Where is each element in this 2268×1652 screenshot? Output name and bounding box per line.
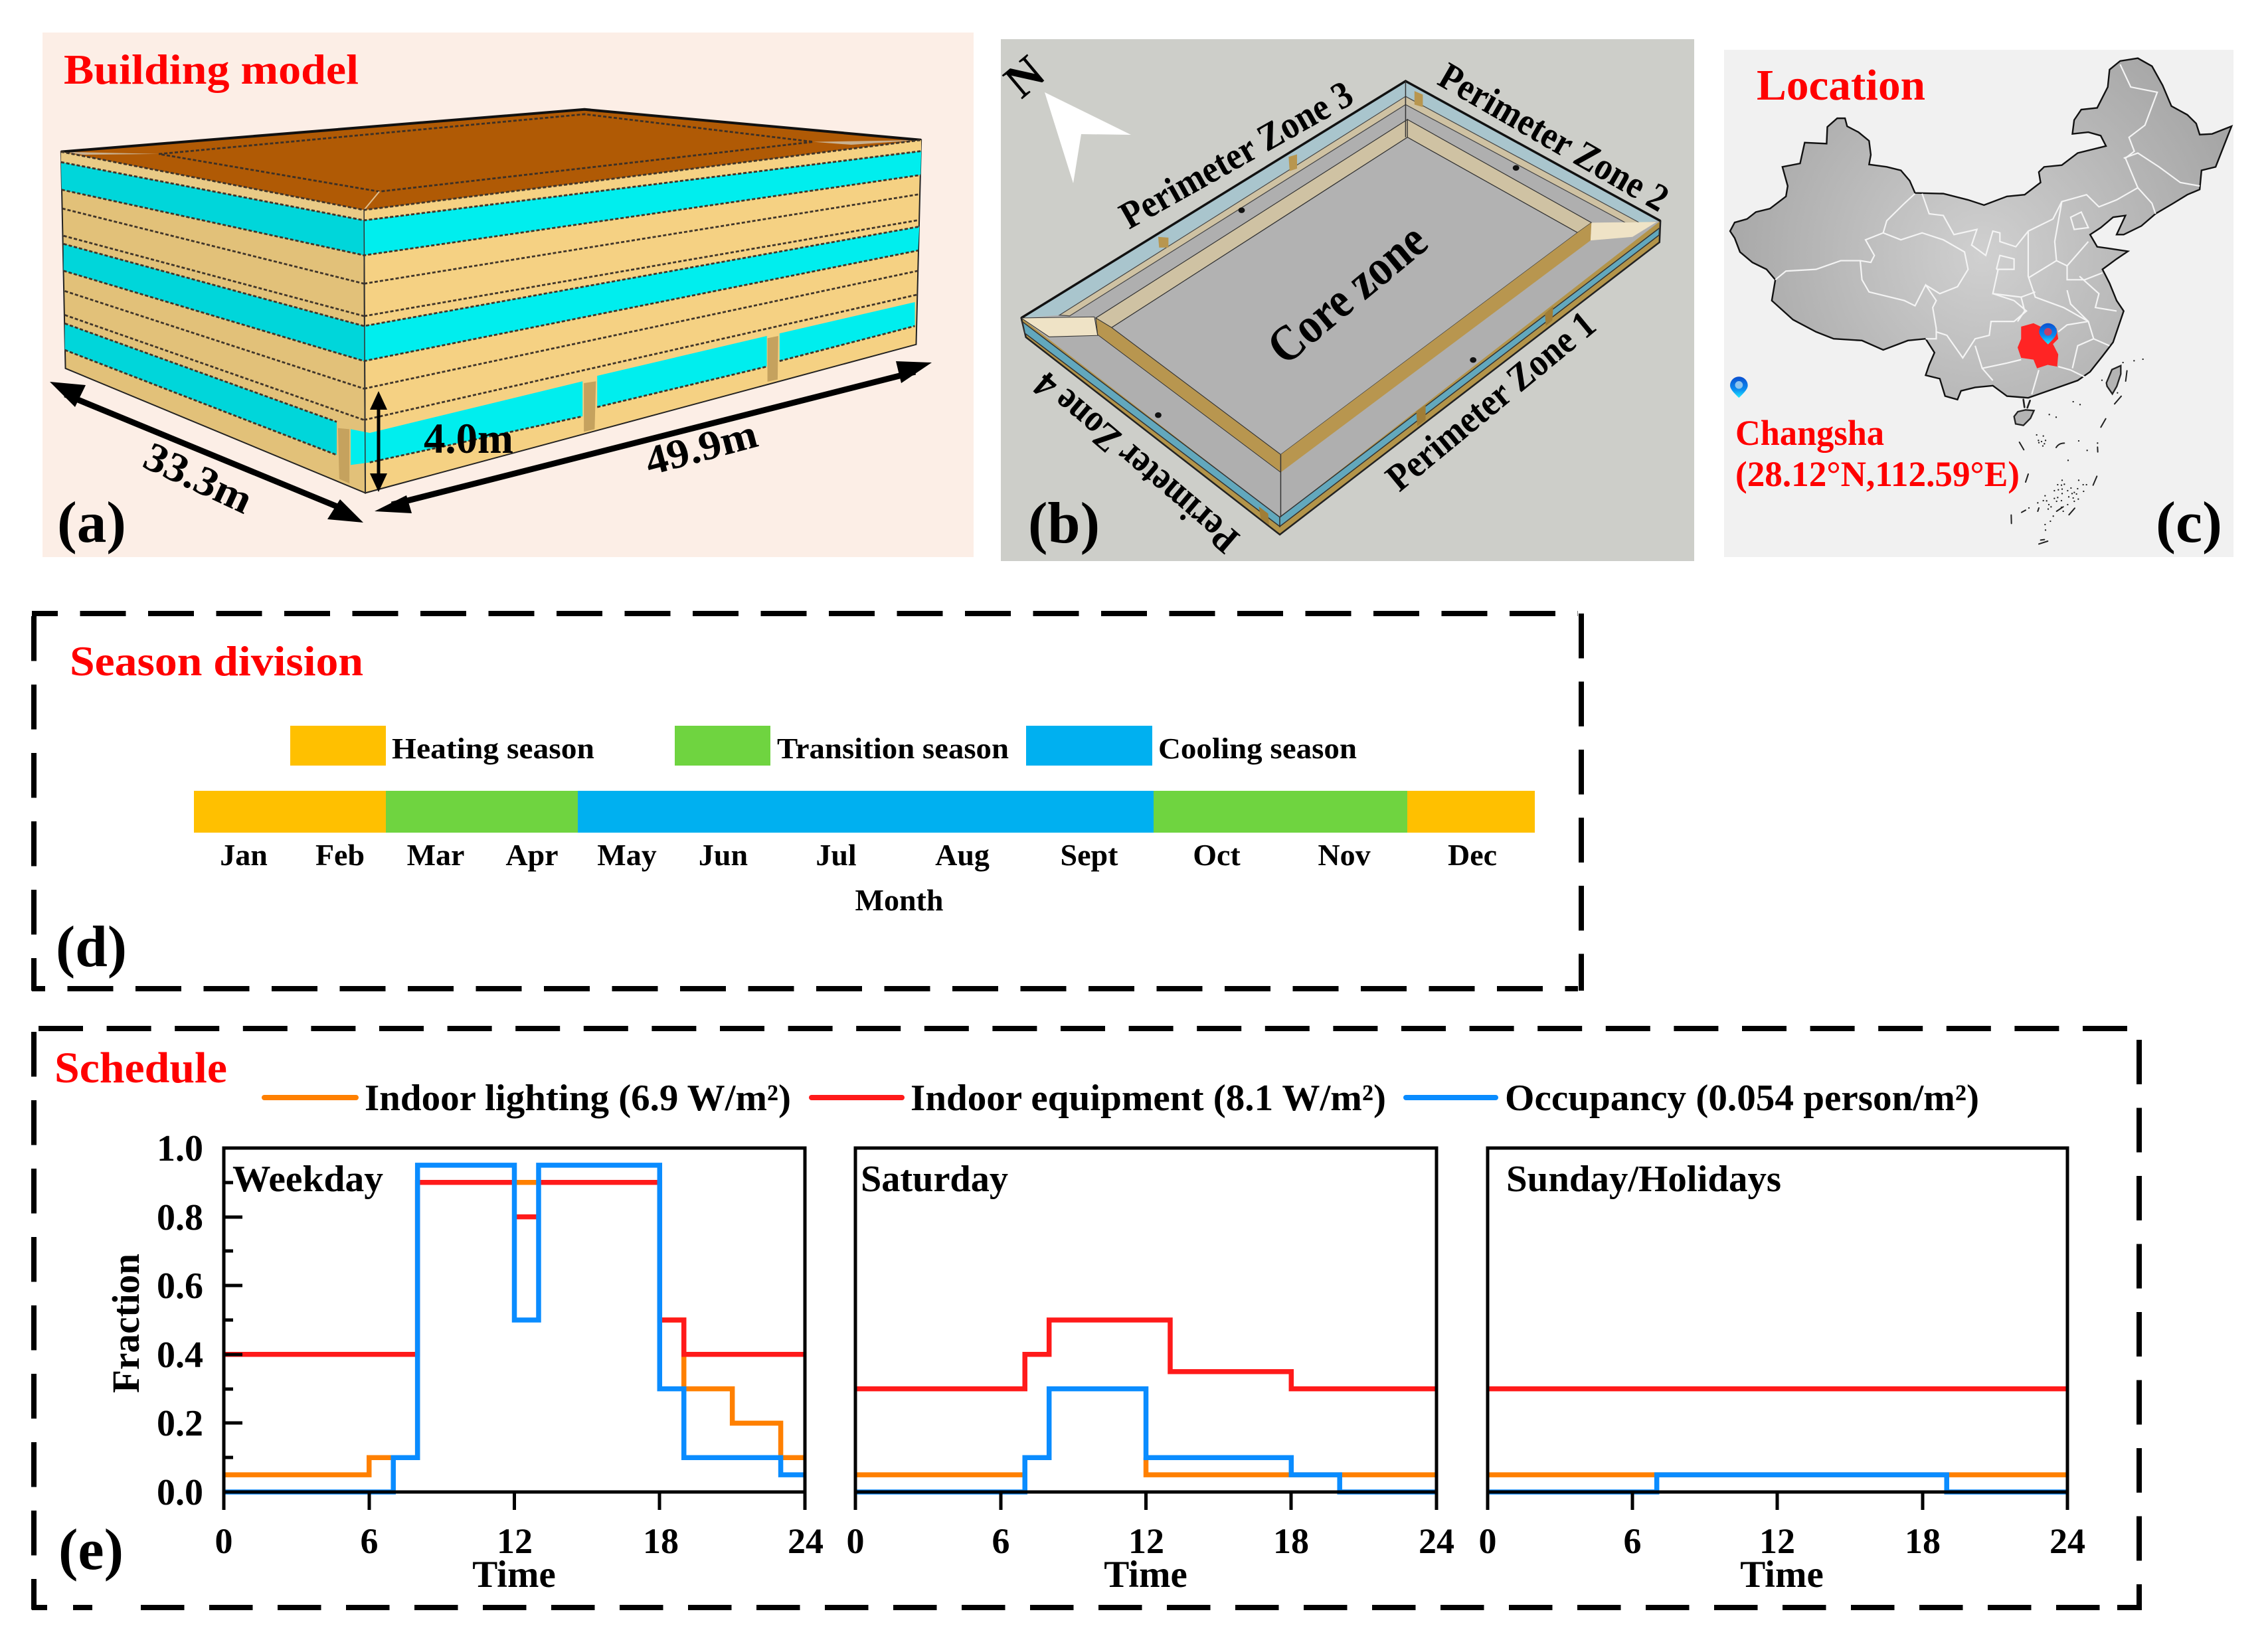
chart: Weekday (104, 1128, 824, 1596)
axis title: Time: Time (472, 1554, 556, 1596)
dashed frame (32, 1029, 2142, 1610)
panel label (b): (b) (1028, 491, 1100, 556)
y axis tick labels: 1.0 (157, 1128, 203, 1169)
legend: Occupancy (0.054 person/m²) (1505, 1078, 1979, 1119)
x axis tick labels: 12 (1128, 1521, 1164, 1561)
heading: Building model: Building model (64, 46, 359, 93)
icon: pin on Changsha (2039, 323, 2057, 345)
month labels: Feb (315, 838, 365, 872)
month labels: May (597, 838, 657, 872)
panel label (a): (a) (57, 491, 126, 555)
panel: schedule (e) (32, 1029, 2142, 1610)
label: N: N (994, 45, 1055, 108)
x axis tick labels: 24 (1419, 1521, 1454, 1561)
legend: Indoor lighting (6.9 W/m²) (365, 1078, 791, 1119)
panel: building model (a) (43, 33, 974, 557)
y axis tick labels: 0.0 (157, 1472, 203, 1513)
season bar (194, 791, 1535, 833)
arrow: 49.9m length dimension (375, 361, 932, 513)
panel label (c): (c) (2156, 491, 2222, 555)
x axis tick labels: 0 (1478, 1521, 1497, 1561)
panel: location map (c) (1724, 50, 2233, 557)
axis title: Time: Time (1104, 1554, 1187, 1596)
x axis tick labels: 24 (788, 1521, 824, 1561)
legend: Cooling season (1158, 732, 1357, 765)
panel label (e): (e) (58, 1518, 124, 1582)
x axis tick labels (215, 1521, 824, 1561)
chart: Sunday/Holidays (1478, 1148, 2085, 1596)
month labels: Dec (1448, 838, 1497, 872)
month labels: Nov (1318, 838, 1371, 872)
chart title: Weekday: Weekday (232, 1159, 383, 1200)
axis title: Time: Time (1740, 1554, 1824, 1596)
x axis tick labels: 24 (2050, 1521, 2085, 1561)
label: Changsha coordinates: Changsha (1735, 413, 1884, 453)
legend (264, 1078, 1979, 1119)
month labels: Aug (935, 838, 990, 872)
legend: Indoor equipment (8.1 W/m²) (911, 1078, 1386, 1119)
y axis tick labels: 0.6 (157, 1266, 203, 1307)
axis title: Month: Month (855, 883, 943, 917)
Hunan province highlight (2018, 323, 2058, 369)
chart title: Saturday: Saturday (861, 1159, 1008, 1200)
panel: season division (d) (32, 614, 1581, 991)
y axis tick labels: 0.2 (157, 1403, 203, 1444)
chart title: Sunday/Holidays: Sunday/Holidays (1506, 1159, 1781, 1200)
legend (290, 726, 1357, 766)
x axis tick labels: 0 (215, 1521, 232, 1561)
label: Changsha coordinates (1735, 413, 2020, 494)
panel label (d): (d) (56, 915, 127, 979)
heading: Location: Location (1757, 61, 1925, 110)
y axis tick labels (157, 1128, 203, 1513)
x axis tick labels: 18 (1273, 1521, 1309, 1561)
x axis tick labels: 6 (1623, 1521, 1642, 1561)
Hainan, Taiwan and South China Sea islands (2011, 359, 2143, 544)
month labels (220, 838, 1497, 872)
x axis tick labels: 12 (497, 1521, 533, 1561)
month labels: Oct (1193, 838, 1241, 872)
x axis tick labels: 6 (992, 1521, 1009, 1561)
icon: legend pin (1730, 376, 1748, 398)
month labels: Mar (407, 838, 464, 872)
x axis tick labels: 0 (846, 1521, 865, 1561)
x axis tick labels: 12 (1759, 1521, 1795, 1561)
month labels: Jun (699, 838, 748, 872)
label: Changsha coordinates: (28.12°N,112.59°E) (1735, 454, 2020, 494)
map of China (1730, 58, 2231, 400)
x axis tick labels: 18 (643, 1521, 679, 1561)
arrow: 4.0m height dimension (370, 391, 387, 492)
zone plan drawing (1021, 81, 1660, 535)
legend: Transition season (777, 732, 1009, 765)
dimension label: 49.9m: 49.9m (640, 411, 762, 485)
label: Perimeter Zone 3: Perimeter Zone 3 (1112, 72, 1360, 237)
month labels: Sept (1061, 838, 1118, 872)
month labels: Apr (505, 838, 559, 872)
arrow: 33.3m depth dimension (50, 382, 363, 523)
label: Perimeter Zone 2: Perimeter Zone 2 (1432, 54, 1676, 220)
x axis tick labels (1478, 1521, 2085, 1561)
y axis tick labels: 0.8 (157, 1197, 203, 1238)
legend: Heating season (392, 732, 594, 765)
heading: Season division: Season division (70, 637, 363, 685)
month labels: Jan (220, 838, 268, 872)
icon: north arrow (994, 45, 1131, 183)
heading: Schedule: Schedule (54, 1044, 227, 1092)
month labels: Jul (816, 838, 857, 872)
dimension label: 33.3m: 33.3m (137, 434, 260, 523)
x axis tick labels: 18 (1905, 1521, 1941, 1561)
x axis tick labels: 6 (360, 1521, 379, 1561)
y axis tick labels: 0.4 (157, 1335, 203, 1376)
dimension label: 4.0m: 4.0m (424, 415, 513, 463)
axis title: Fraction: Fraction (104, 1254, 147, 1393)
label: Perimeter Zone 4: Perimeter Zone 4 (1025, 364, 1247, 562)
chart: Saturday (846, 1148, 1454, 1596)
panel: zone plan (b) (994, 39, 1694, 562)
dashed frame (32, 614, 1581, 991)
label: Perimeter Zone 1: Perimeter Zone 1 (1377, 302, 1604, 499)
label: Core zone: Core zone (1257, 212, 1438, 375)
3D building drawing (61, 110, 921, 493)
x axis tick labels (846, 1521, 1454, 1561)
